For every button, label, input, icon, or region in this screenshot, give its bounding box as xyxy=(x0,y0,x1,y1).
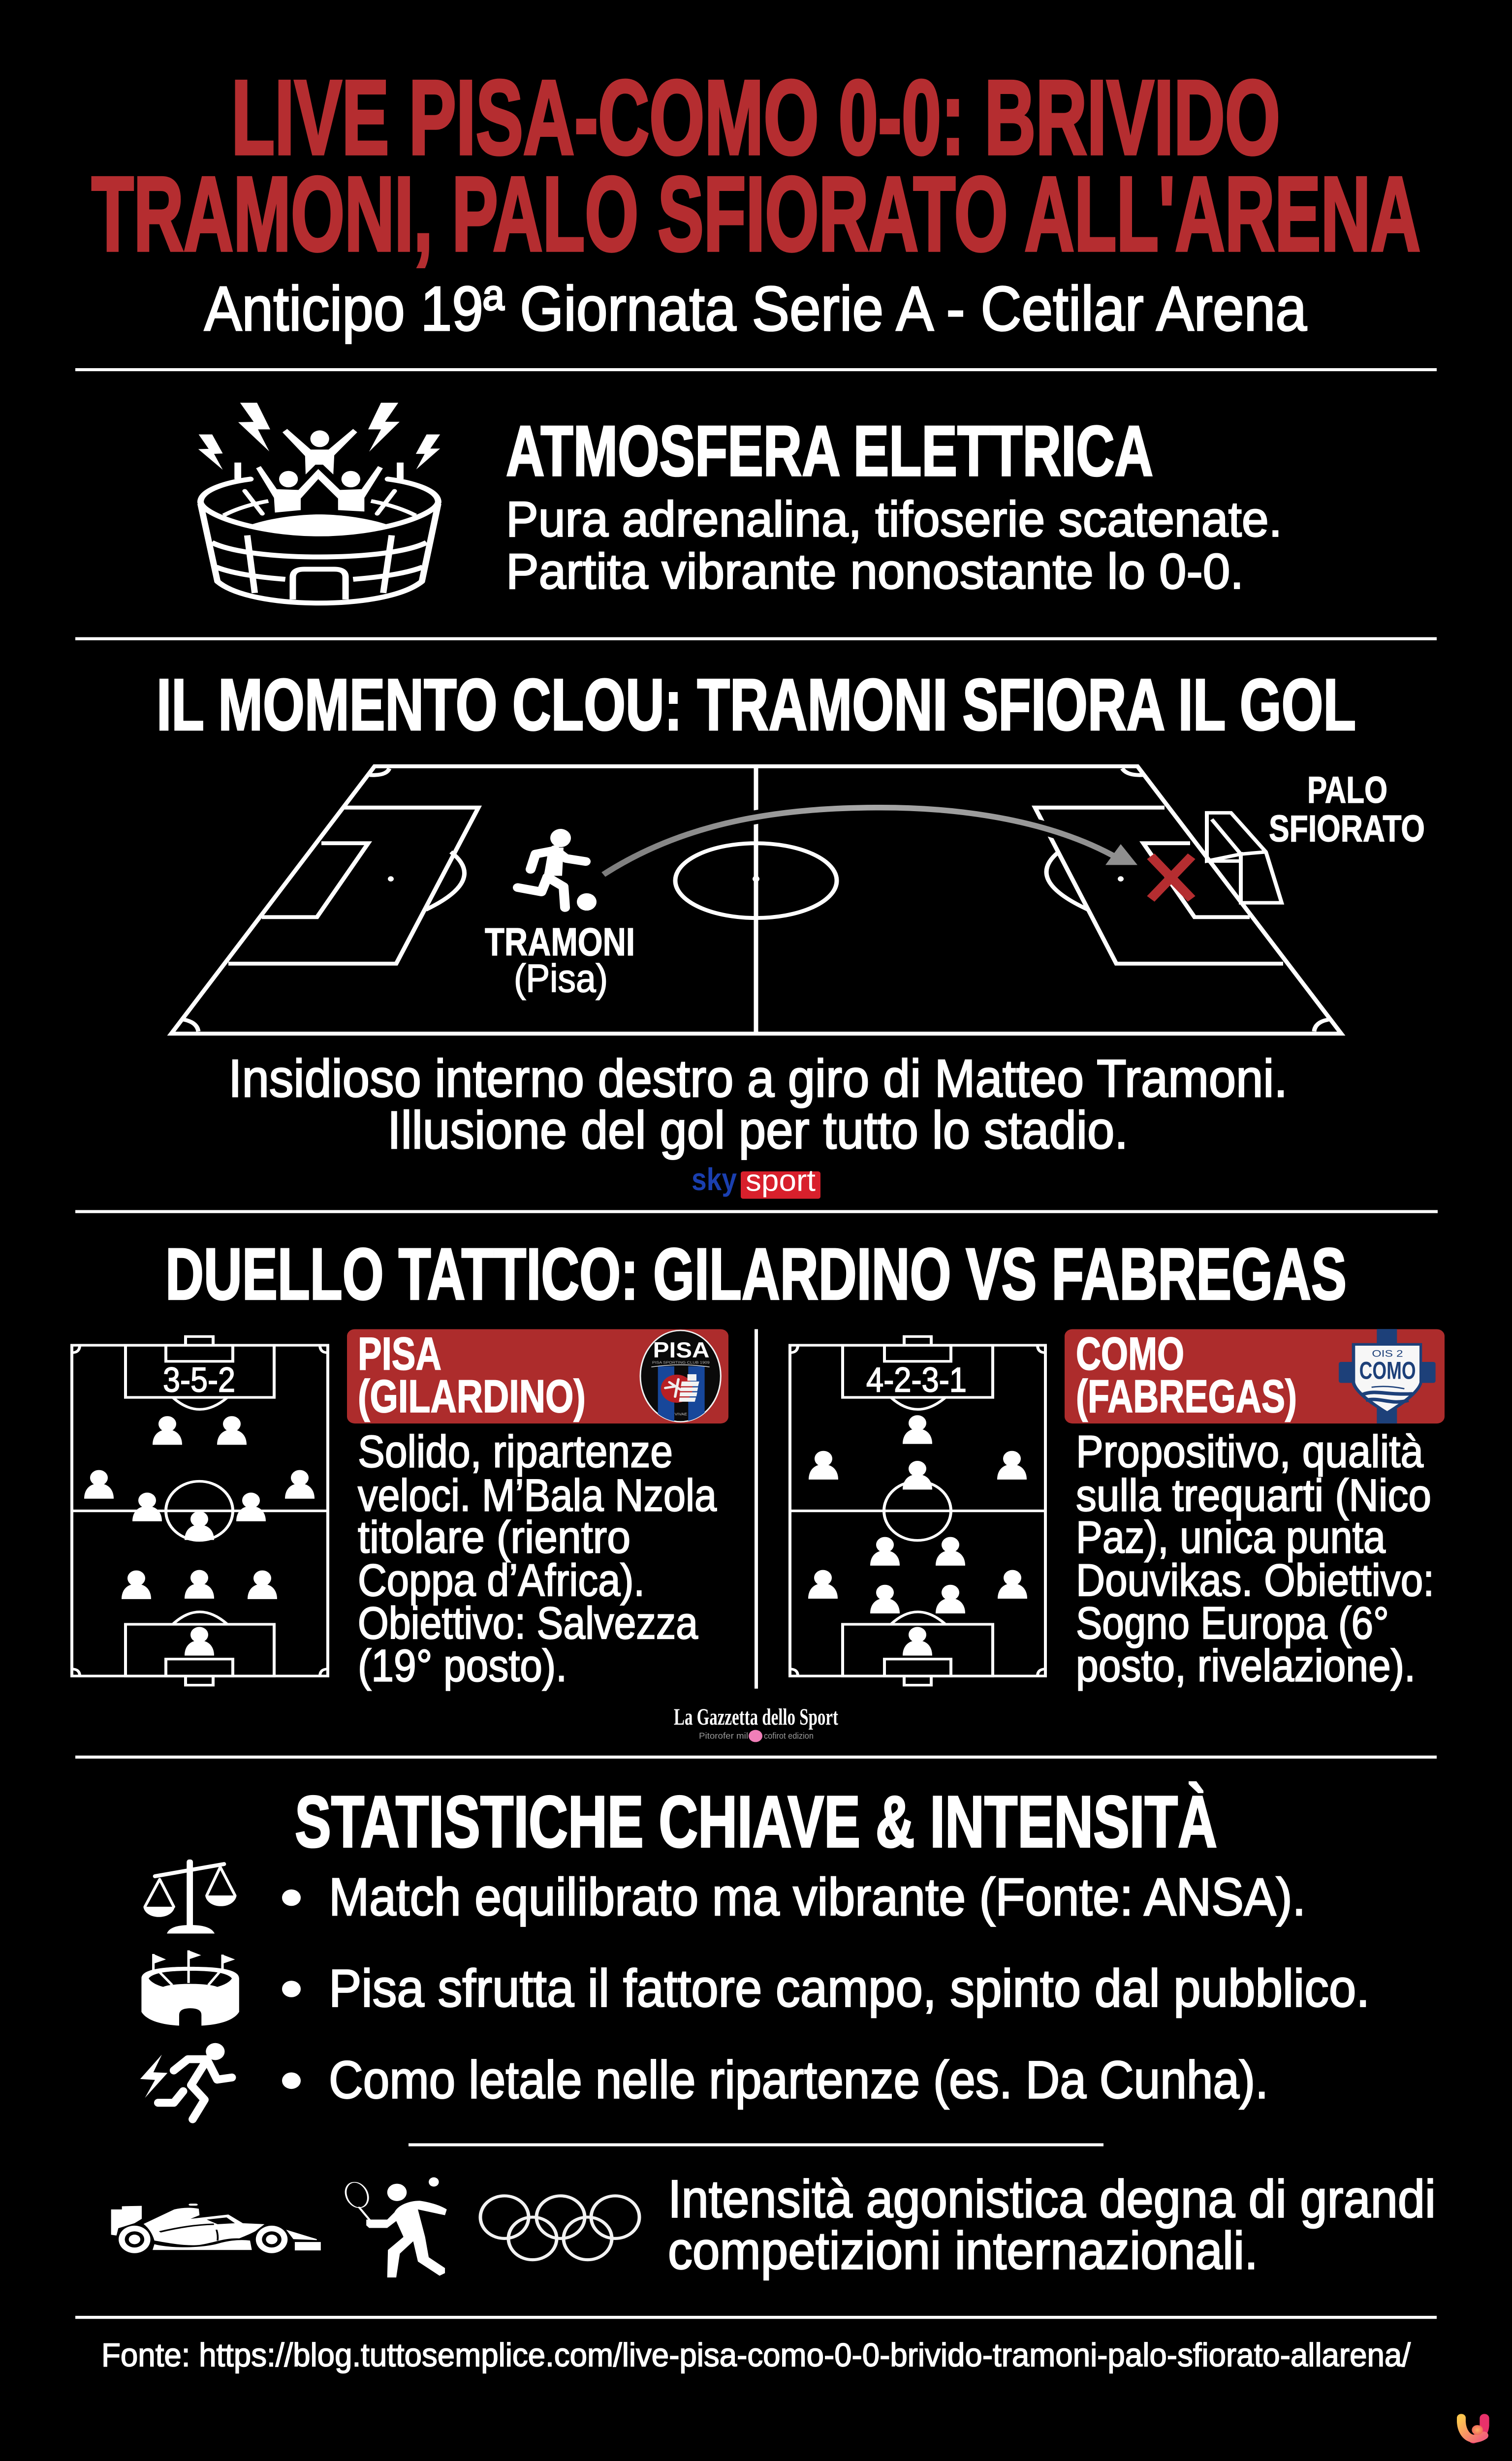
logo: Como crest: OIS 2 xyxy=(1372,1349,1403,1359)
label: Tramoni: (Pisa) xyxy=(514,956,608,1000)
chart: Pisa formation 3-5-2: 3-5-2 xyxy=(163,1360,235,1399)
header: Pisa: (GILARDINO) xyxy=(358,1371,586,1422)
header: Como: COMO xyxy=(1076,1328,1184,1380)
text block: Como: posto, rivelazione). xyxy=(1076,1640,1416,1691)
text block: Como: Paz), unica punta xyxy=(1076,1512,1386,1562)
logo: Pisa crest xyxy=(640,1330,721,1424)
text block: Pisa: Obiettivo: Salvezza xyxy=(358,1598,698,1648)
arrow: shot trajectory xyxy=(603,808,1137,875)
icon: running player with lightning xyxy=(140,2043,232,2119)
chart: Pisa formation 3-5-2 xyxy=(72,1336,328,1685)
text block: Como: Propositivo, qualità xyxy=(1076,1426,1423,1477)
logo: Pisa crest: VIVAE xyxy=(675,1412,688,1416)
logo: sky sport xyxy=(692,1163,820,1199)
logo: corner mark xyxy=(1461,2418,1484,2439)
panel: atmosfera elettrica xyxy=(198,403,1282,603)
label: Tramoni: TRAMONI xyxy=(485,920,635,964)
panel: Pisa xyxy=(72,1328,728,1691)
text block: Pisa: Coppa d’Africa). xyxy=(358,1554,645,1605)
heading: atmosfera: ATMOSFERA ELETTRICA xyxy=(506,411,1153,491)
text block: atmosfera xyxy=(506,491,1282,599)
label: Tramoni xyxy=(485,920,635,1000)
logo: La Gazzetta dello Sport: La Gazzetta dello Sport xyxy=(674,1704,838,1730)
text block: tiro: Insidioso interno destro a giro di Matteo Tramoni. xyxy=(228,1049,1288,1108)
text block: intensità xyxy=(668,2170,1436,2280)
icon: stadium with fans and lightning xyxy=(198,403,440,603)
header: Pisa: PISA xyxy=(358,1328,441,1380)
icon: goal frame xyxy=(1207,813,1282,903)
text block: Pisa: titolare (rientro xyxy=(358,1512,630,1562)
logo: sky sport: sky xyxy=(692,1163,737,1197)
logo: La Gazzetta dello Sport xyxy=(674,1704,838,1742)
icon: stadium with flags xyxy=(141,1950,239,2025)
text block: atmosfera: Partita vibrante nonostante lo 0-0. xyxy=(506,543,1244,599)
icon: race car xyxy=(111,2204,321,2253)
text block: tiro: Illusione del gol per tutto lo stadio. xyxy=(387,1101,1128,1160)
header: Pisa xyxy=(347,1328,728,1424)
logo: La Gazzetta dello Sport: Pitorofer mil xyxy=(699,1731,748,1740)
label: palo sfiorato: SFIORATO xyxy=(1269,808,1425,850)
text block: tiro xyxy=(228,1049,1288,1160)
title xyxy=(92,58,1420,273)
chart: perspective pitch xyxy=(171,766,1425,1034)
text block: Como: sulla trequarti (Nico xyxy=(1076,1470,1431,1520)
header: Como: (FABREGAS) xyxy=(1076,1371,1297,1422)
logo: Como crest xyxy=(1339,1329,1436,1423)
icon: olympic rings xyxy=(480,2196,639,2260)
bullet text 1: Match equilibrato ma vibrante (Fonte: ANSA). xyxy=(329,1867,1306,1926)
text block: Pisa: Solido, ripartenze xyxy=(358,1426,673,1477)
text block: Pisa: (19° posto). xyxy=(358,1640,567,1691)
text block: Pisa: veloci. M’Bala Nzola xyxy=(358,1470,717,1520)
logo: Pisa crest: PISA SPORTING CLUB 1909 xyxy=(652,1360,710,1364)
chart: Como formation 4-2-3-1: 4-2-3-1 xyxy=(866,1360,967,1399)
text block: Como xyxy=(1076,1426,1434,1691)
chart: Como formation 4-2-3-1 xyxy=(790,1336,1045,1685)
label: palo sfiorato: PALO xyxy=(1307,770,1387,811)
logo: Pisa crest: PISA xyxy=(653,1338,710,1362)
icon: red cross xyxy=(1151,856,1192,899)
logo: Como crest: COMO xyxy=(1359,1357,1416,1385)
panel: statistiche list xyxy=(140,1860,1370,2119)
text block: Pisa xyxy=(358,1426,717,1691)
text block: atmosfera: Pura adrenalina, tifoserie scatenate. xyxy=(506,491,1282,547)
icon: scales xyxy=(143,1860,237,1933)
panel: Como xyxy=(790,1328,1445,1691)
logo: La Gazzetta dello Sport: cofirot edizion xyxy=(764,1731,814,1740)
panel: intensità xyxy=(111,2170,1436,2280)
logo: sky sport: sport xyxy=(746,1163,816,1198)
bullet text 3: Como letale nelle ripartenze (es. Da Cunha). xyxy=(329,2051,1268,2110)
header: Como xyxy=(1065,1328,1445,1423)
icon: tennis player xyxy=(344,2177,447,2277)
text block: intensità: competizioni internazionali. xyxy=(668,2221,1258,2280)
text block: Como: Sogno Europa (6° xyxy=(1076,1598,1389,1648)
label: palo sfiorato xyxy=(1269,770,1425,850)
icon: player kicking ball xyxy=(518,829,597,911)
